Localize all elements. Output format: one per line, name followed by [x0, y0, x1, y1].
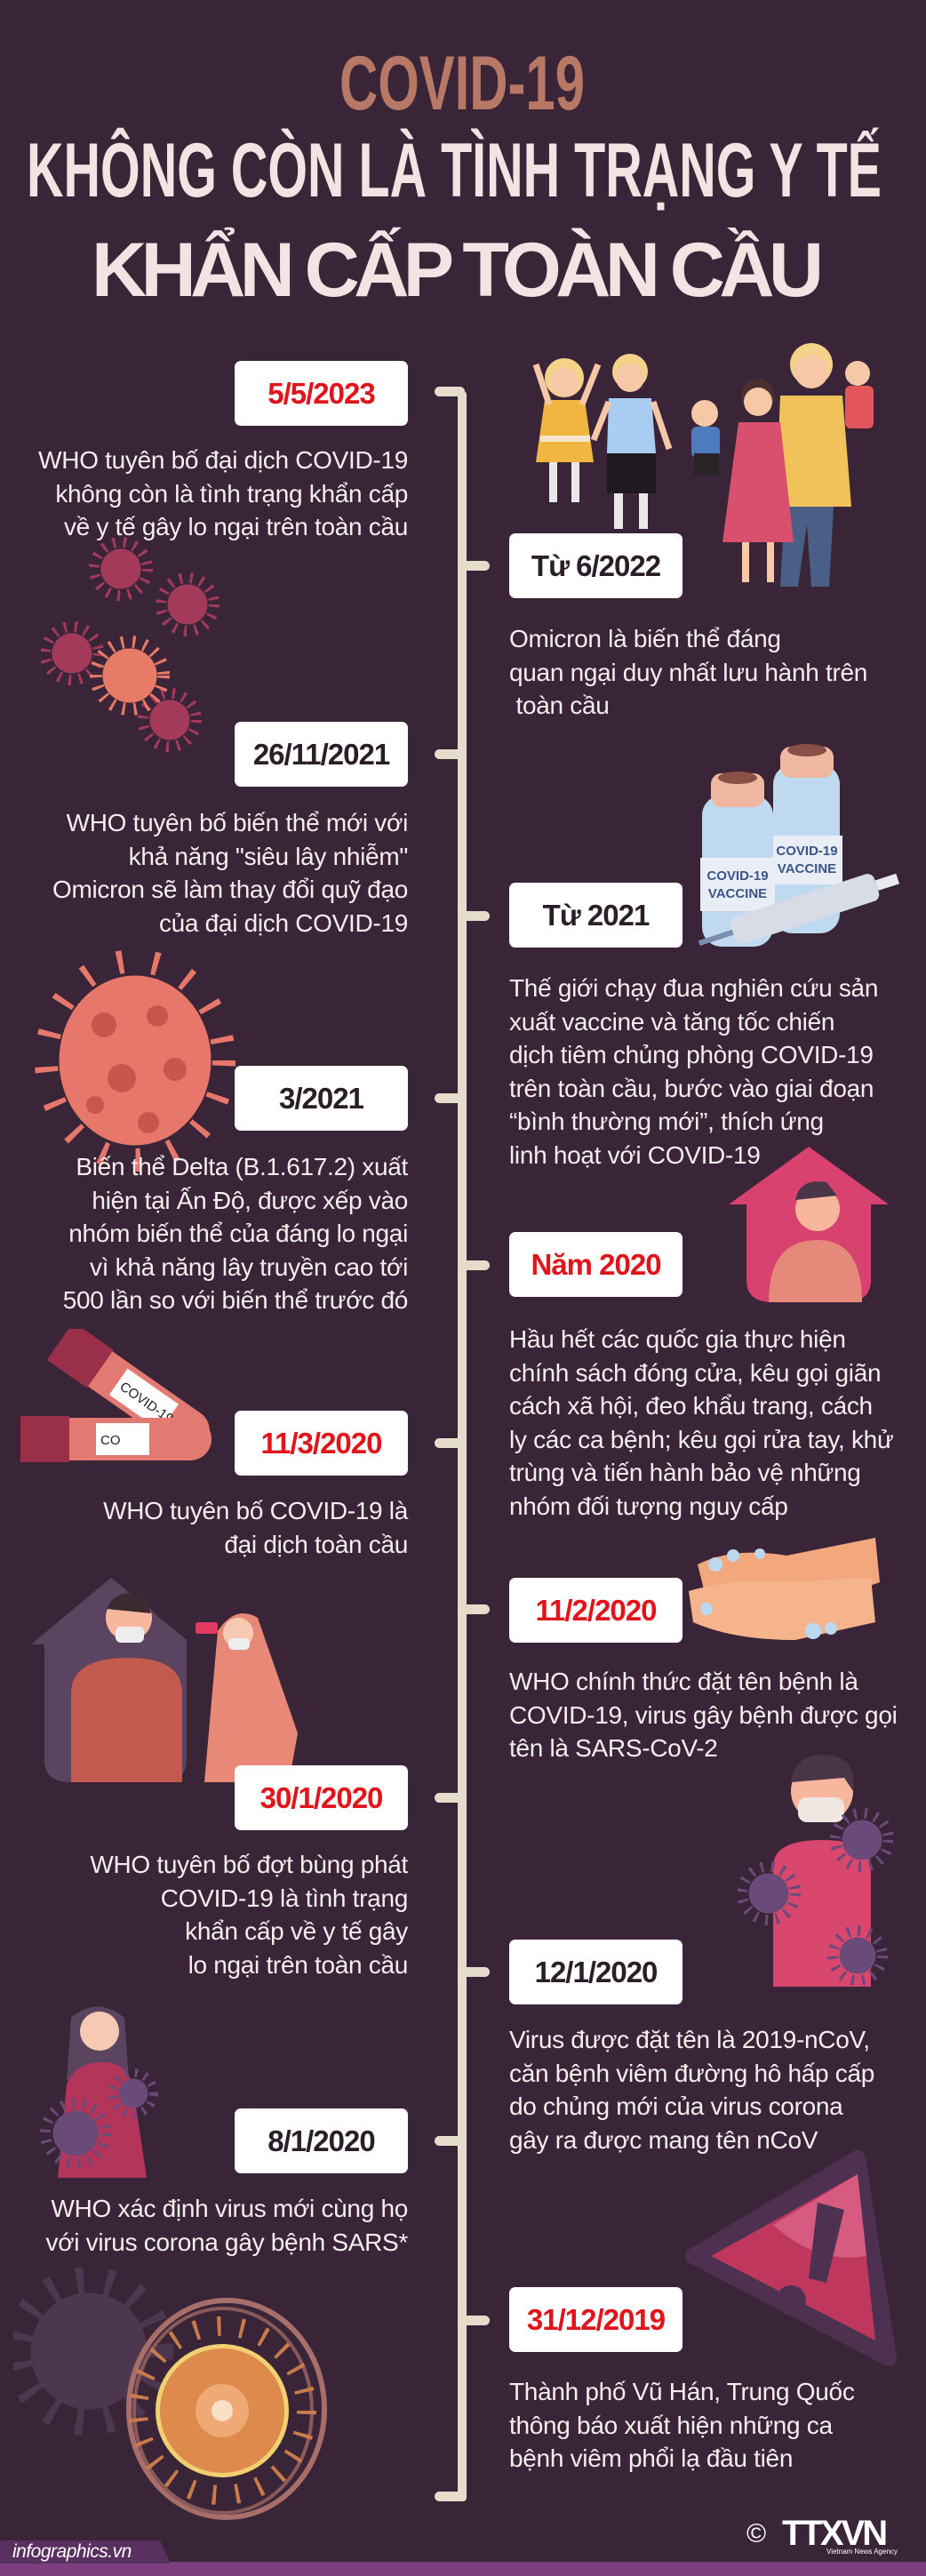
text: Năm 2020: nhóm đối tượng nguy cấp [509, 1492, 788, 1520]
text: 31/12/2019: Thành phố Vũ Hán, Trung Quốc [509, 2378, 855, 2405]
text: 3/2021 [63, 1153, 409, 1314]
text: 3/2021: hiện tại Ấn Độ, được xếp vào [92, 1186, 408, 1214]
text: 8/1/2020: WHO xác định virus mới cùng họ [52, 2195, 408, 2222]
date: 30/1/2020: 30/1/2020 [260, 1781, 382, 1813]
text: 30/1/2020: lo ngại trên toàn cầu [188, 1950, 408, 1979]
text: 11/2/2020: tên là SARS-CoV-2 [509, 1734, 718, 1762]
date: Từ 6/2022 [509, 533, 683, 598]
icon: house with man [729, 1147, 889, 1302]
date: 11/3/2020 [235, 1411, 408, 1476]
text: 5/5/2023: không còn là tình trạng khẩn cấp [55, 480, 408, 507]
title [27, 41, 882, 311]
date: 12/1/2020 [509, 1940, 683, 2004]
date: Năm 2020: Năm 2020 [531, 1248, 661, 1280]
text: 8/1/2020: với virus corona gây bệnh SARS* [46, 2228, 408, 2256]
text: Năm 2020: Hầu hết các quốc gia thực hiện [509, 1325, 846, 1353]
date: Từ 2021: Từ 2021 [543, 898, 649, 932]
text: Năm 2020: cách xã hội, đeo khẩu trang, cách [509, 1392, 873, 1420]
date: 3/2021 [235, 1066, 408, 1131]
text: 31/12/2019 [509, 2378, 855, 2472]
icon: test tubes: COVID-19 [117, 1379, 176, 1427]
text: 12/1/2020: gây ra được mang tên nCoV [509, 2126, 818, 2153]
logo: TTXVN: Vietnam News Agency [826, 2548, 898, 2556]
text: 31/12/2019: thông báo xuất hiện những ca [509, 2411, 833, 2439]
text: 8/1/2020 [46, 2195, 408, 2256]
text: 31/12/2019: bệnh viêm phổi lạ đầu tiên [509, 2444, 793, 2472]
date: Từ 6/2022: Từ 6/2022 [531, 549, 660, 581]
text: 11/2/2020 [509, 1668, 898, 1762]
text: 30/1/2020: COVID-19 là tình trạng [161, 1884, 408, 1911]
text: Năm 2020: chính sách đóng cửa, kêu gọi giãn [509, 1358, 881, 1387]
text: Từ 6/2022: Omicron là biến thể đáng [509, 625, 781, 652]
timeline line [458, 391, 467, 2501]
footer band [0, 2562, 926, 2576]
text: Năm 2020 [509, 1325, 893, 1520]
text: 12/1/2020: do chủng mới của virus corona [509, 2092, 842, 2120]
icon: house with temperature check [31, 1578, 298, 1782]
text: 11/2/2020: COVID-19, virus gây bệnh được gọi [509, 1701, 898, 1728]
icon: big corona virus [13, 2267, 327, 2520]
date: 11/3/2020: 11/3/2020 [261, 1426, 382, 1460]
date: 31/12/2019: 31/12/2019 [527, 2302, 665, 2336]
icon: vaccine [698, 744, 899, 947]
icon: warning triangle [685, 2150, 897, 2366]
text: Từ 2021: “bình thường mới”, thích ứng [509, 1108, 824, 1135]
text: Từ 6/2022: toàn cầu [515, 692, 610, 719]
text: 11/3/2020 [103, 1497, 409, 1557]
text: Từ 2021 [509, 974, 878, 1168]
text: 3/2021: nhóm biến thể của đáng lo ngại [68, 1220, 408, 1247]
icon: test tubes: CO [100, 1433, 121, 1448]
footer: infographics.vn [0, 2540, 171, 2564]
text: 12/1/2020 [509, 2026, 874, 2154]
icon: virus cluster [41, 537, 220, 752]
text: 26/11/2021: WHO tuyên bố biến thể mới với [67, 809, 408, 836]
icon: washing hands [689, 1538, 880, 1640]
text: 26/11/2021: Omicron sẽ làm thay đổi quỹ đạo [52, 876, 408, 903]
text: Từ 6/2022 [509, 625, 867, 719]
date: 8/1/2020 [235, 2108, 408, 2173]
text: Từ 6/2022: quan ngại duy nhất lưu hành trên [509, 658, 867, 686]
text: 12/1/2020: Virus được đặt tên là 2019-nCoV, [509, 2026, 870, 2053]
text: 11/3/2020: đại dịch toàn cầu [224, 1531, 408, 1557]
text: 11/2/2020: WHO chính thức đặt tên bệnh là [509, 1668, 858, 1695]
text: Từ 2021: dịch tiêm chủng phòng COVID-19 [509, 1041, 874, 1068]
icon: man with mask and viruses [738, 1755, 893, 1987]
date: 11/2/2020: 11/2/2020 [535, 1593, 656, 1627]
icon: delta virus [35, 950, 235, 1172]
text: Năm 2020: ly các ca bệnh; kêu gọi rửa tay, khử [509, 1426, 893, 1452]
text: Từ 2021: linh hoạt với COVID-19 [509, 1141, 761, 1168]
logo: TTXVN: TTXVN [782, 2514, 885, 2553]
text: 26/11/2021: của đại dịch COVID-19 [159, 908, 408, 937]
date: 26/11/2021: 26/11/2021 [253, 738, 389, 770]
logo: TTXVN [746, 2514, 898, 2556]
text: 30/1/2020: khẩn cấp về y tế gây [185, 1917, 408, 1945]
text: 12/1/2020: căn bệnh viêm đường hô hấp cấp [509, 2059, 874, 2087]
text: 30/1/2020: WHO tuyên bố đợt bùng phát [90, 1851, 408, 1878]
text: 5/5/2023: WHO tuyên bố đại dịch COVID-19 [38, 446, 408, 474]
icon: family [533, 343, 874, 587]
date: 5/5/2023: 5/5/2023 [267, 377, 375, 409]
text: 26/11/2021: khả năng "siêu lây nhiễm" [129, 843, 408, 869]
title: KHẨN CẤP TOÀN CẦU [92, 228, 824, 311]
footer: infographics.vn: infographics.vn [12, 2541, 132, 2562]
date: 26/11/2021 [235, 722, 408, 787]
text: Từ 2021: Thế giới chạy đua nghiên cứu sản [509, 974, 878, 1002]
date: 31/12/2019 [509, 2287, 683, 2352]
icon: vaccine: VACCINE [778, 861, 836, 876]
logo: TTXVN: © [746, 2519, 766, 2548]
text: 3/2021: Biến thể Delta (B.1.617.2) xuất [76, 1153, 408, 1180]
icon: woman with viruses [40, 2007, 158, 2178]
date: 8/1/2020: 8/1/2020 [267, 2124, 375, 2156]
title: COVID-19 [339, 41, 585, 126]
text: 3/2021: 500 lần so với biến thể trước đó [63, 1286, 408, 1314]
text: Từ 2021: xuất vaccine và tăng tốc chiến [509, 1008, 834, 1035]
icon: vaccine: COVID-19 [776, 844, 838, 859]
icon: test tubes [20, 1329, 212, 1462]
icon: vaccine: COVID-19 [706, 868, 769, 884]
date: 5/5/2023 [235, 361, 408, 426]
date: Năm 2020 [509, 1232, 683, 1297]
date: 30/1/2020 [235, 1765, 408, 1830]
text: 11/3/2020: WHO tuyên bố COVID-19 là [103, 1497, 408, 1524]
text: 30/1/2020 [90, 1851, 409, 1979]
date: Từ 2021 [509, 883, 683, 948]
date: 12/1/2020: 12/1/2020 [535, 1956, 657, 1988]
date: 11/2/2020 [509, 1578, 683, 1643]
text: 5/5/2023: về y tế gây lo ngại trên toàn cầu [64, 513, 408, 540]
text: 26/11/2021 [52, 809, 408, 937]
date: 3/2021: 3/2021 [279, 1081, 363, 1115]
text: 3/2021: vì khả năng lây truyền cao tới [90, 1253, 408, 1280]
text: Từ 2021: trên toàn cầu, bước vào giai đoạn [509, 1074, 874, 1102]
icon: vaccine: VACCINE [708, 886, 767, 901]
text: 5/5/2023 [38, 446, 408, 540]
text: Năm 2020: trùng và tiến hành bảo vệ những [509, 1459, 861, 1486]
